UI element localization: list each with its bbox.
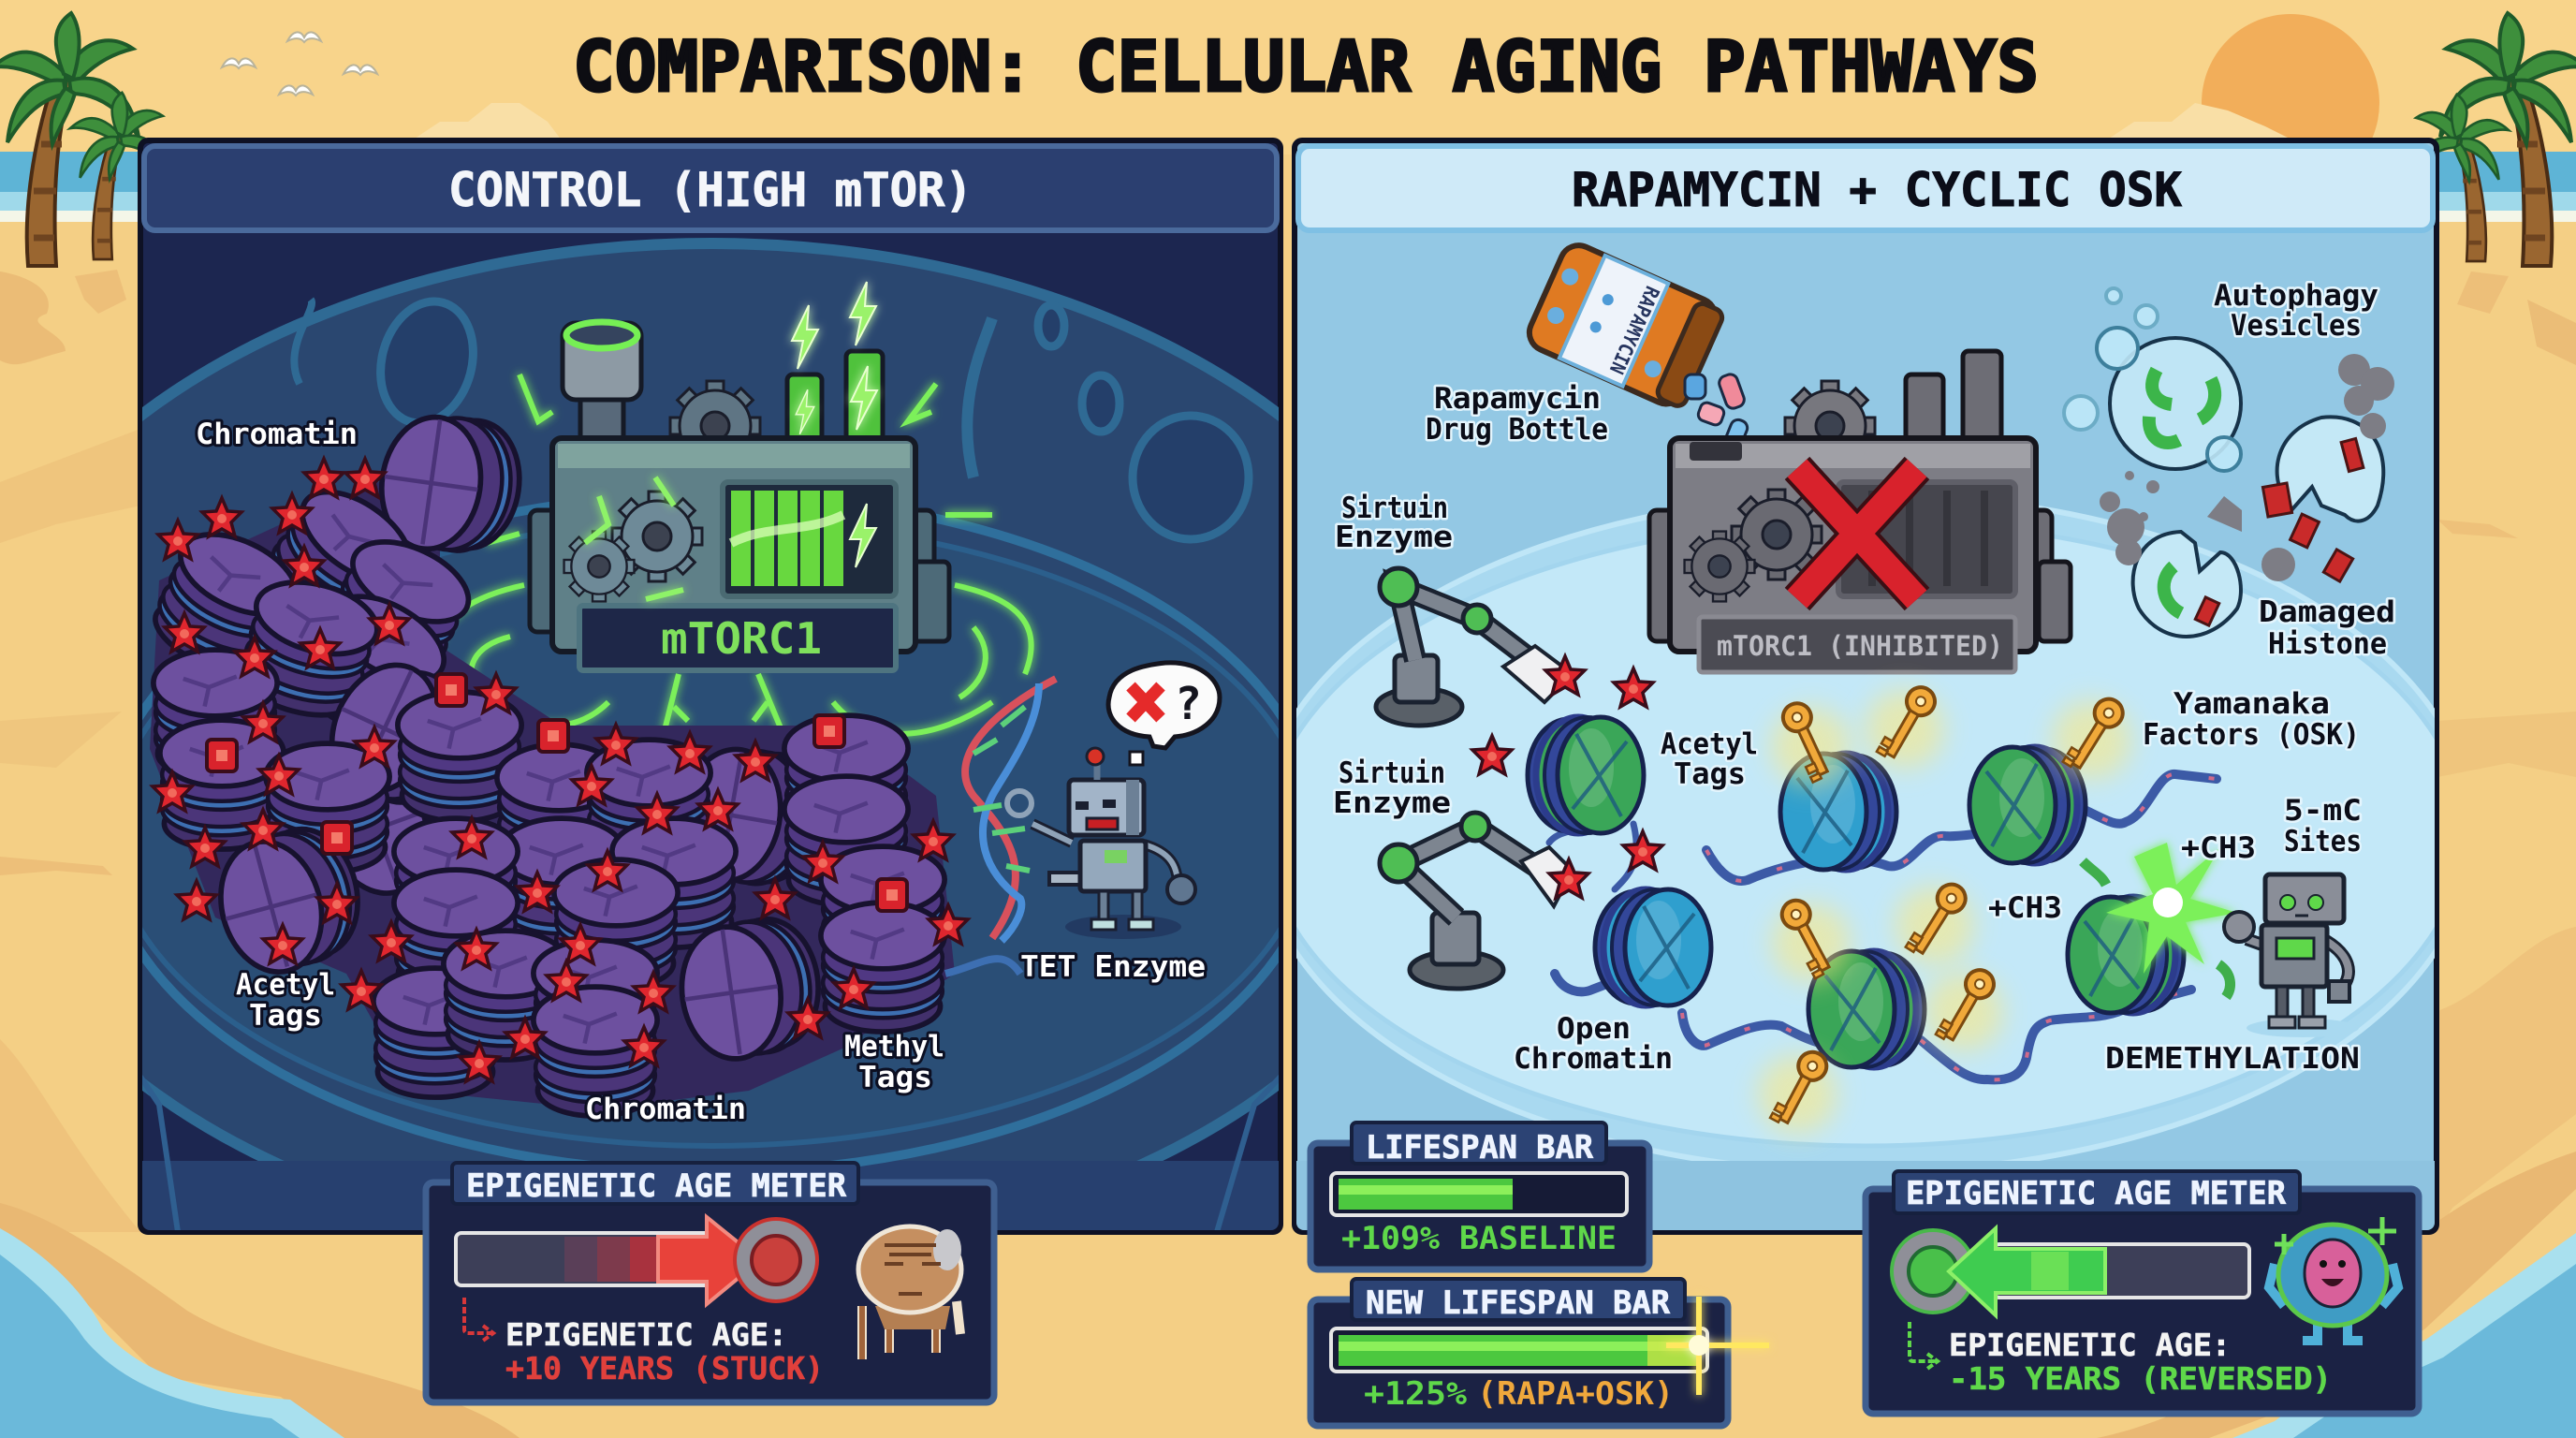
label: acetyl tags: Acetyl	[236, 968, 335, 1002]
label: chromatin top: Chromatin	[196, 418, 358, 451]
label: open chromatin: Open	[1557, 1012, 1631, 1046]
body	[552, 438, 915, 652]
lifespan bar	[1310, 1123, 1649, 1269]
label: TET enzyme: TET Enzyme	[1020, 950, 1206, 984]
nucleosomes open chromatin	[1528, 717, 2184, 1067]
chimney	[563, 322, 641, 457]
new lifespan bar: NEW LIFESPAN BAR	[1366, 1284, 1671, 1322]
label: rapamycin drug bottle	[1426, 382, 1608, 447]
sparkle	[1666, 1297, 1769, 1395]
label: acetyl tags	[1661, 727, 1758, 791]
plate	[1699, 617, 2015, 672]
label: rapamycin drug bottle: Drug Bottle	[1426, 413, 1608, 447]
title: COMPARISON: CELLULAR AGING PATHWAYS	[573, 25, 2039, 108]
header: rapamycin	[1298, 146, 2433, 230]
meter text	[1949, 1327, 2332, 1397]
chromatin pile	[141, 408, 1020, 1116]
autophagy vesicles	[2064, 288, 2394, 637]
label: autophagy vesicles: Autophagy	[2214, 279, 2378, 313]
damaged vesicle upper	[2277, 417, 2383, 521]
icon: red X	[1131, 686, 1161, 718]
gear top	[670, 381, 760, 471]
pills	[1685, 373, 1749, 455]
label: sirtuin enzyme bottom: Enzyme	[1333, 786, 1451, 820]
bar fill	[1331, 1328, 1707, 1372]
panel: rapamycin + cyclic OSK	[1257, 140, 2474, 1236]
label: demethylation: DEMETHYLATION	[2105, 1042, 2360, 1076]
removed acetyl tags	[1472, 656, 1662, 898]
panel: control	[138, 138, 1283, 1235]
sun	[2202, 14, 2379, 192]
plate	[579, 606, 896, 670]
label: open chromatin	[1514, 1012, 1673, 1076]
rapamycin drug bottle: RAPAMYCIN	[1605, 283, 1663, 377]
icon: old man	[858, 1226, 961, 1359]
label: damaged histone	[2259, 595, 2395, 661]
palm right small	[2412, 95, 2509, 261]
tubes	[781, 351, 888, 455]
label: sirtuin enzyme bottom	[1333, 756, 1451, 820]
main vesicle	[2110, 338, 2241, 469]
meter bar	[1949, 1228, 2249, 1315]
header: rapamycin: RAPAMYCIN + CYCLIC OSK	[1572, 163, 2182, 217]
DNA helix	[965, 679, 1056, 941]
label: autophagy vesicles: Vesicles	[2231, 309, 2362, 343]
label: acetyl tags	[236, 968, 335, 1033]
debris	[2195, 438, 2364, 625]
cell background	[1257, 494, 2474, 1236]
meter target	[735, 1219, 817, 1301]
icon: red X	[1797, 468, 1917, 599]
meter text: EPIGENETIC AGE:	[505, 1316, 787, 1353]
demethylation burst	[2106, 843, 2237, 974]
dead screen	[1838, 482, 2015, 596]
energy swirls	[434, 374, 1032, 734]
speech bubble: ?	[1175, 678, 1202, 730]
meter target	[1892, 1230, 1974, 1313]
DNA strands	[1549, 774, 2217, 1079]
yamanaka keys	[1745, 669, 2149, 1148]
new lifespan bar	[1310, 1279, 1769, 1426]
meter bar	[456, 1217, 760, 1304]
new lifespan bar: +125%	[1364, 1375, 1468, 1413]
icon: happy cell	[2269, 1217, 2398, 1341]
label: open chromatin: Chromatin	[1514, 1042, 1673, 1076]
label: sirtuin enzyme bottom: Sirtuin	[1339, 756, 1445, 790]
meter text: +10 YEARS (STUCK)	[505, 1350, 824, 1387]
plate: mTORC1	[661, 613, 822, 664]
palm left large	[0, 13, 139, 266]
label: yamanaka factors	[2143, 687, 2360, 752]
green arrow	[1910, 1322, 1938, 1369]
label: autophagy vesicles	[2214, 279, 2378, 343]
label: damaged histone: Damaged	[2259, 595, 2395, 629]
label: +CH3 lower: +CH3	[1988, 891, 2062, 925]
label: methyl tags	[844, 1030, 944, 1094]
lifespan bar: LIFESPAN BAR	[1366, 1129, 1594, 1167]
machine: inhibited mTORC1	[1649, 351, 2071, 672]
label: 5-mC sites: 5-mC	[2284, 794, 2362, 828]
palm right large	[2440, 13, 2576, 266]
plate: mTORC1 (INHIBITED)	[1717, 630, 2003, 662]
new lifespan bar: (RAPA+OSK)	[1477, 1375, 1674, 1413]
label: sirtuin enzyme top	[1335, 492, 1453, 554]
sirtuin enzyme arm bottom	[1380, 813, 1573, 989]
demethylase robot	[2224, 874, 2359, 1037]
label: +CH3 upper: +CH3	[2181, 831, 2256, 865]
label: yamanaka factors: Yamanaka	[2174, 687, 2330, 721]
sea right	[2434, 152, 2576, 222]
wave left	[0, 1228, 344, 1438]
label: 5-mC sites	[2284, 794, 2362, 858]
wave right	[2232, 1233, 2576, 1438]
lifespan bar: +109% BASELINE	[1341, 1220, 1617, 1257]
label: damaged histone: Histone	[2268, 627, 2387, 661]
gears	[564, 492, 702, 601]
label: acetyl tags: Tags	[1674, 757, 1746, 791]
sea left	[0, 152, 140, 222]
damaged vesicle lower	[2133, 532, 2241, 637]
meter tab: EPIGENETIC AGE METER	[466, 1167, 847, 1205]
TET enzyme robot	[1007, 748, 1195, 939]
label: 5-mC sites: Sites	[2284, 825, 2362, 858]
label: acetyl tags: Acetyl	[1661, 727, 1758, 761]
screen	[723, 482, 896, 596]
side tabs	[530, 510, 949, 641]
meter: control epigenetic age	[426, 1163, 994, 1402]
nucleus background	[142, 238, 1279, 1230]
palm left small	[70, 93, 167, 259]
speech bubble	[1108, 663, 1220, 765]
label: methyl tags: Methyl	[844, 1030, 944, 1064]
label: sirtuin enzyme top: Enzyme	[1335, 521, 1453, 554]
bar fill	[1331, 1173, 1627, 1215]
machine: mTORC1	[530, 282, 949, 670]
sirtuin enzyme arm top	[1376, 568, 1573, 726]
label: methyl tags: Tags	[858, 1061, 932, 1094]
meter text	[505, 1316, 824, 1387]
rapamycin drug bottle	[1524, 240, 1726, 412]
label: chromatin bottom: Chromatin	[585, 1093, 746, 1126]
meter text: -15 YEARS (REVERSED)	[1949, 1360, 2332, 1397]
label: yamanaka factors: Factors (OSK)	[2143, 718, 2360, 752]
label: rapamycin drug bottle: Rapamycin	[1434, 382, 1601, 416]
label: acetyl tags: Tags	[249, 999, 322, 1033]
clouds	[412, 103, 2293, 140]
header: control	[144, 146, 1277, 230]
meter tab: EPIGENETIC AGE METER	[1906, 1175, 2287, 1212]
DNA fragments	[2083, 861, 2231, 997]
meter: rapamycin epigenetic age	[1866, 1171, 2419, 1414]
meter text: EPIGENETIC AGE:	[1949, 1327, 2231, 1363]
seagulls	[222, 32, 377, 95]
label: sirtuin enzyme top: Sirtuin	[1341, 492, 1448, 525]
acetyl and methyl tags	[153, 459, 968, 1081]
red arrow	[464, 1298, 493, 1341]
header: control: CONTROL (HIGH mTOR)	[448, 163, 973, 217]
